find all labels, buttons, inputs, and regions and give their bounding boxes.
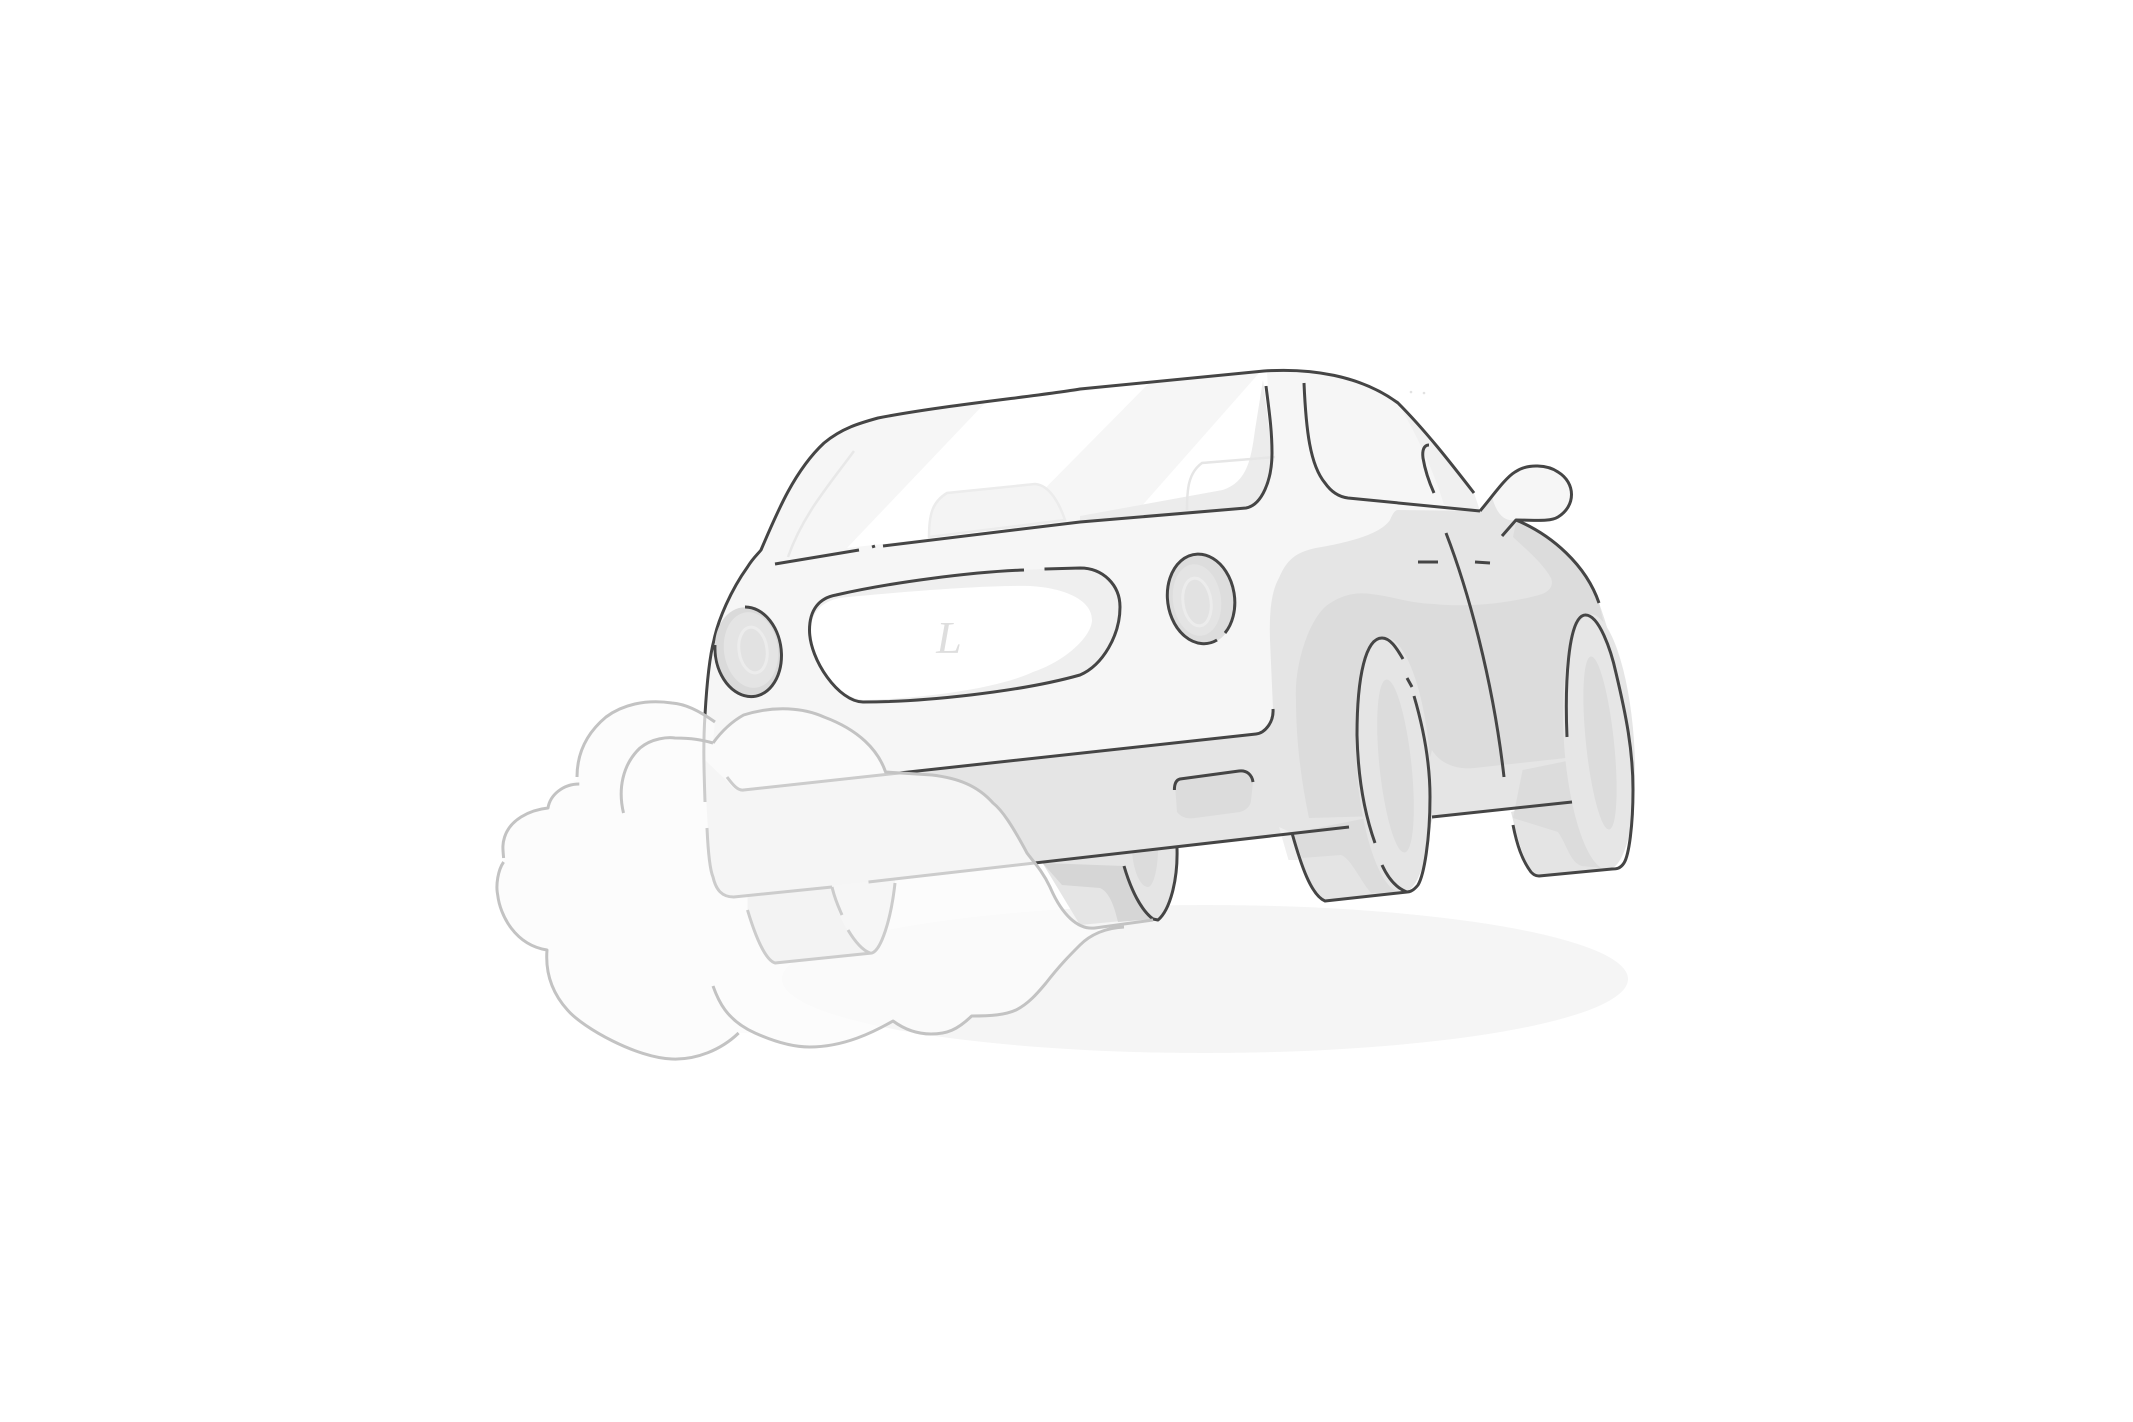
bumper upper line — [727, 709, 1273, 790]
ground shadow — [782, 905, 1628, 1053]
rear window lower edge — [775, 386, 1272, 564]
side mirror — [1480, 466, 1572, 536]
brand logo: L — [935, 612, 962, 663]
front fender line — [1516, 520, 1599, 603]
side window — [1304, 383, 1480, 511]
right tail lamp — [1162, 551, 1240, 649]
small quarter window line — [1423, 445, 1434, 493]
roof and left body outline — [704, 370, 1474, 802]
door seam — [1446, 533, 1504, 777]
car body base — [705, 370, 1633, 897]
cloud bottom outline — [713, 927, 1124, 1047]
tiny dust specks — [1410, 391, 1425, 394]
rear left wheel — [748, 860, 895, 963]
car — [704, 370, 1643, 963]
underbody line — [1432, 802, 1572, 817]
front wheel far side — [1511, 612, 1643, 876]
cloud fill — [497, 702, 1124, 1059]
bumper lower outline — [707, 827, 1349, 897]
cloud left outline — [497, 702, 739, 1059]
trunk handle recess — [1174, 771, 1253, 818]
side window tint — [1398, 403, 1480, 511]
front wheel near side — [1279, 635, 1439, 901]
cloud top ball and swoosh — [713, 709, 1153, 928]
rear plate window — [810, 568, 1120, 702]
rear window glass highlights — [847, 372, 1272, 548]
cloud inner curl — [621, 738, 713, 813]
smoke cloud — [497, 702, 1153, 1059]
side body shading — [705, 490, 1633, 897]
rear right wheel — [1042, 848, 1177, 925]
left tail lamp — [709, 603, 787, 701]
door handles — [1418, 562, 1490, 563]
interior: seats and pillar — [788, 451, 1275, 557]
side body deep shading — [1296, 520, 1631, 818]
